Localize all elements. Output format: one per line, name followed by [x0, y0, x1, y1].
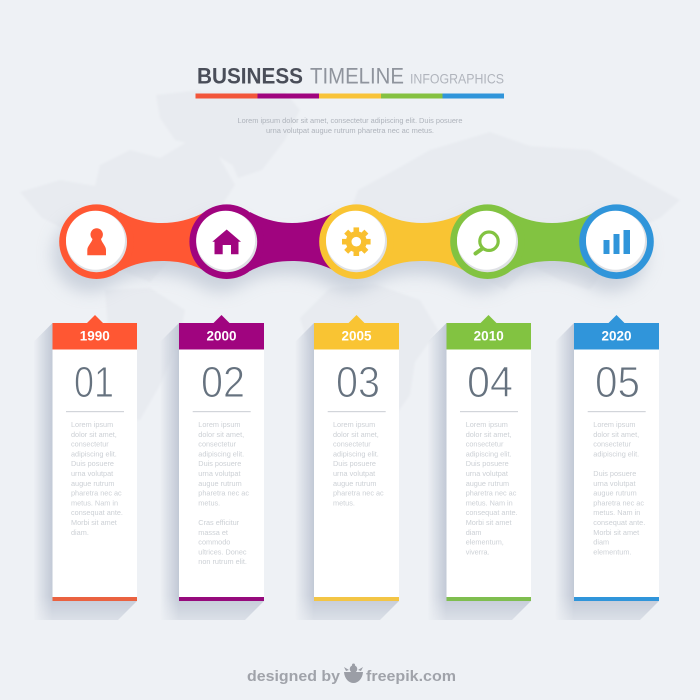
body text: urna volutpat	[198, 469, 241, 478]
body text: diam	[593, 538, 609, 547]
body text: Duis posuere	[333, 459, 376, 468]
body text: dolor sit amet,	[71, 430, 117, 439]
world map	[20, 90, 680, 430]
divider	[588, 411, 646, 412]
body text: urna volutpat	[466, 469, 508, 478]
year tab 2010	[446, 315, 531, 350]
body text: pharetra nec ac	[466, 489, 517, 498]
body text: consectetur	[333, 440, 371, 449]
body text: Lorem ipsum	[466, 420, 508, 429]
panel: card 2005	[295, 315, 399, 620]
body text: augue rutrum	[71, 479, 114, 488]
body text: Morbi sit amet	[593, 528, 639, 537]
body text: urna volutpat	[593, 479, 636, 488]
panel: card 1990	[34, 315, 137, 620]
body text: Duis posuere	[71, 459, 114, 468]
body text: dolor sit amet,	[593, 430, 639, 439]
divider	[193, 411, 251, 412]
body text: Duis posuere	[466, 459, 509, 468]
icon: bar chart	[604, 230, 630, 254]
body text: Lorem ipsum	[593, 420, 635, 429]
body text: metus. Nam in	[593, 508, 640, 517]
number 03: 03	[336, 358, 380, 407]
year tab 1990: 1990	[80, 328, 110, 344]
icon: house	[212, 230, 241, 254]
timeline step 4: search	[450, 204, 595, 279]
body text: consectetur	[466, 440, 504, 449]
body text: consequat ante.	[593, 518, 645, 527]
body text: adipiscing elit.	[71, 449, 117, 458]
body text: urna volutpat	[71, 469, 113, 478]
title	[197, 64, 504, 88]
body text: pharetra nec ac	[593, 498, 644, 507]
timeline chain shadow	[53, 217, 647, 292]
subtitle: urna volutpat augue rutrum pharetra nec ac metus.	[266, 126, 434, 135]
body text: dolor sit amet,	[198, 430, 244, 439]
body text: adipiscing elit.	[333, 449, 379, 458]
body text: diam	[466, 528, 482, 537]
body text: adipiscing elit.	[466, 449, 512, 458]
number 02: 02	[201, 358, 245, 407]
footer: freepik credit: designed by	[247, 668, 341, 685]
body text: augue rutrum	[198, 479, 242, 488]
title: INFOGRAPHICS	[410, 72, 504, 86]
panel: card 2000	[160, 315, 264, 620]
body text: Morbi sit amet	[466, 518, 512, 527]
year tab 2020: 2020	[601, 328, 632, 344]
body text: Cras efficitur	[198, 518, 240, 527]
body text: Lorem ipsum	[71, 420, 113, 429]
year tab 2005: 2005	[341, 328, 372, 344]
body text: augue rutrum	[593, 489, 637, 498]
body text: adipiscing elit.	[593, 449, 639, 458]
panel: card 2010	[428, 315, 531, 620]
body text: pharetra nec ac	[71, 489, 122, 498]
year tab 2010: 2010	[474, 328, 504, 344]
body text: consequat ante.	[71, 508, 123, 517]
body text: augue rutrum	[333, 479, 376, 488]
body text: viverra.	[466, 547, 490, 556]
timeline step 1: person	[59, 204, 205, 279]
title: TIMELINE	[310, 64, 404, 88]
body text: consectetur	[71, 440, 109, 449]
body text: consectetur	[593, 440, 632, 449]
bottom bar	[574, 597, 659, 601]
body text: Duis posuere	[198, 459, 241, 468]
body text: dolor sit amet,	[333, 430, 379, 439]
icon: freepik crown bowl	[344, 664, 363, 683]
year tab 2005	[314, 315, 399, 350]
body text: augue rutrum	[466, 479, 509, 488]
divider	[328, 411, 386, 412]
subtitle	[238, 116, 462, 135]
footer: freepik credit: freepik.com	[366, 668, 456, 685]
title: BUSINESS	[197, 64, 303, 88]
body text: elementum,	[466, 538, 504, 547]
body text: pharetra nec ac	[198, 489, 249, 498]
body text: metus. Nam in	[71, 498, 118, 507]
divider	[460, 411, 518, 412]
body text: diam.	[71, 528, 89, 537]
number 01: 01	[74, 358, 114, 407]
body text: urna volutpat	[333, 469, 375, 478]
body text: massa et	[198, 528, 228, 537]
body text: Duis posuere	[593, 469, 636, 478]
title colour bar	[196, 94, 504, 98]
bottom bar	[52, 597, 137, 601]
number 04: 04	[467, 358, 513, 407]
panel: card 2020	[555, 315, 659, 620]
body text: adipiscing elit.	[198, 449, 244, 458]
body text: commodo	[198, 538, 230, 547]
body text: metus.	[333, 498, 355, 507]
body text: metus.	[198, 498, 220, 507]
bottom bar	[446, 597, 531, 601]
year tab 1990	[52, 315, 137, 350]
timeline step 5: chart	[579, 204, 654, 279]
body text: pharetra nec ac	[333, 489, 384, 498]
icon: person	[87, 228, 106, 255]
icon: magnifier	[476, 232, 498, 254]
number 05: 05	[595, 358, 640, 407]
icon: gear	[342, 227, 371, 256]
body text: elementum.	[593, 547, 631, 556]
year tab 2000: 2000	[206, 328, 237, 344]
body text: non rutrum elit.	[198, 557, 247, 566]
footer: freepik credit	[247, 664, 456, 685]
divider	[66, 411, 124, 412]
timeline step 3: settings	[319, 204, 465, 279]
body text: Morbi sit amet	[71, 518, 117, 527]
timeline step 2: home	[189, 204, 335, 279]
body text: Lorem ipsum	[198, 420, 240, 429]
bottom bar	[314, 597, 399, 601]
body text: consequat ante.	[466, 508, 518, 517]
body text: ultrices. Donec	[198, 547, 247, 556]
year tab 2000	[179, 315, 264, 350]
body text: Lorem ipsum	[333, 420, 375, 429]
bottom bar	[179, 597, 264, 601]
body text: dolor sit amet,	[466, 430, 512, 439]
body text: metus. Nam in	[466, 498, 513, 507]
subtitle: Lorem ipsum dolor sit amet, consectetur adipiscing elit. Duis posuere	[238, 116, 462, 125]
body text: consectetur	[198, 440, 237, 449]
year tab 2020	[574, 315, 659, 350]
